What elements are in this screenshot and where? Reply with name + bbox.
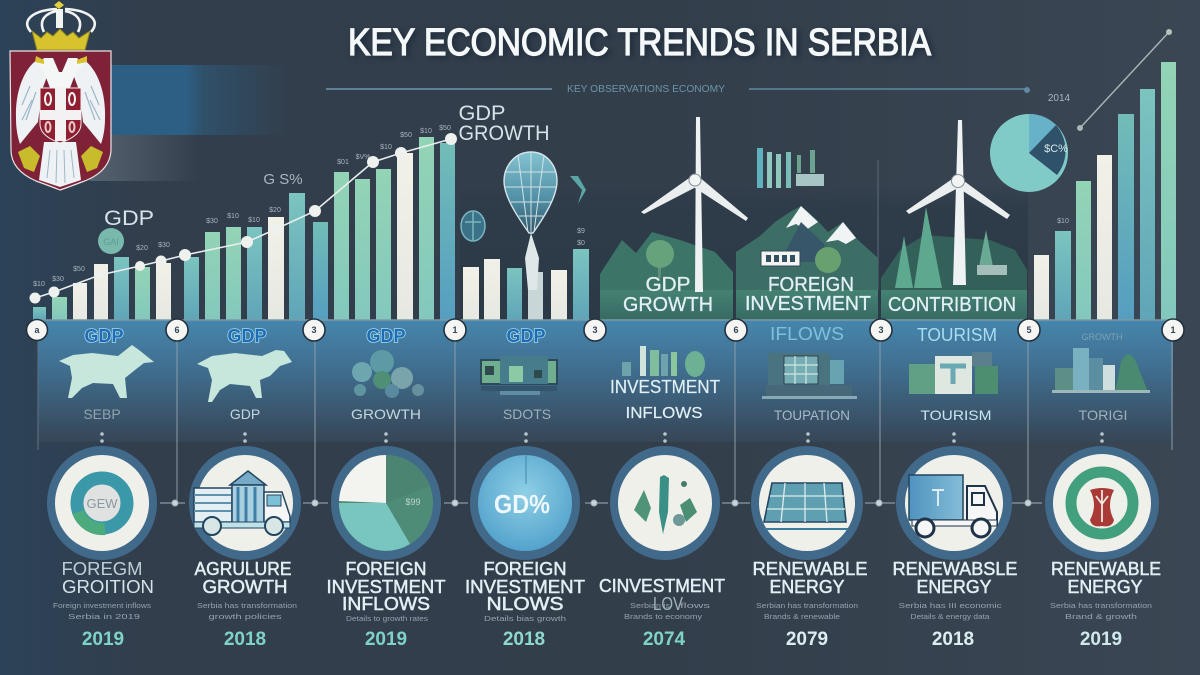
label: SDOTS [503, 406, 551, 422]
column 2 text: 2018 [224, 629, 266, 650]
subtitle rule with caption: KEY OBSERVATIONS ECONOMY [567, 84, 725, 95]
label: FOREIGN [768, 274, 854, 296]
label: INFLOWS [626, 405, 702, 422]
column 8 text [1050, 559, 1161, 650]
bar value labels: $10 [248, 217, 260, 224]
heading: GDP [227, 326, 267, 346]
numbered timeline badges: a [34, 325, 40, 335]
chart label: year: 2014 [1048, 93, 1071, 104]
heading: IFLOWS [770, 324, 844, 344]
numbered timeline badges: 3 [878, 325, 884, 335]
shield [10, 51, 111, 190]
dark textured landscape strip [460, 185, 1028, 320]
bar value labels: $0 [577, 240, 585, 247]
label: GDP [646, 274, 690, 296]
heading: GDP [84, 326, 124, 346]
panel 5: investment inflows [595, 320, 736, 442]
column 7 text: RENEWABSLE [892, 559, 1018, 579]
column 7 text: Serbia has III economic [898, 601, 1002, 610]
column 5 text: LOV [653, 594, 683, 614]
heading: TOURISM [917, 325, 997, 345]
icon: globe balloon [504, 152, 557, 290]
icon: green coin [98, 228, 124, 254]
bar value labels: $01 [337, 159, 349, 166]
icon: goat [197, 350, 292, 402]
column 2 text: growth policies [208, 612, 282, 621]
bar value labels: $30 [52, 276, 64, 283]
column 6 text: Serbian has transformation [756, 601, 858, 610]
circle icon 1: donut gauge [47, 446, 157, 560]
talons [18, 146, 103, 172]
column 4 text [465, 559, 585, 650]
column 8 text: RENEWABLE [1051, 559, 1161, 579]
column 4 text: NLOWS [486, 594, 564, 614]
circle icon 1: donut gauge: GEW [86, 496, 118, 511]
numbered timeline badges: 6 [733, 325, 739, 335]
circle icon 3: pie chart: $99 [405, 497, 421, 507]
column 7 text: Details & energy data [910, 612, 990, 621]
column 3 text: INVESTMENT [326, 577, 446, 597]
small house [977, 265, 1007, 275]
chart label: percentage: G S% [263, 171, 303, 188]
column 1 text [53, 559, 154, 650]
column 3 text: Details to growth rates [346, 614, 428, 623]
column 7 text: ENERGY [916, 577, 992, 597]
heading: GDP [506, 326, 546, 346]
column 6 text: 2079 [786, 629, 828, 650]
trees [895, 207, 994, 288]
bar value labels: $V% [356, 154, 370, 161]
landscape panel: GDP growth [600, 117, 748, 320]
connector dots between circles [160, 500, 1042, 506]
label: CONTRIBTION [888, 294, 1016, 316]
bar value labels: $10 [380, 144, 392, 151]
heading: GDP [366, 326, 406, 346]
pie chart: $C% [1044, 143, 1068, 155]
central red shield with cross [40, 88, 81, 143]
title: KEY ECONOMIC TRENDS IN SERBIA [348, 22, 932, 64]
numbered timeline badges: 3 [311, 325, 317, 335]
bar value labels: $9 [577, 228, 585, 235]
numbered timeline badges: 5 [1026, 325, 1032, 335]
icon: tree [646, 240, 674, 278]
column 2 text [194, 559, 297, 650]
eagle wings and body [16, 58, 48, 144]
bar chart: right side [1034, 62, 1176, 320]
chart label: GDP growth [458, 102, 550, 145]
label: GROWTH [623, 294, 713, 316]
growth arrow line [1077, 29, 1172, 131]
column 6 text: RENEWABLE [752, 559, 868, 579]
panel 4: SDOTS [455, 320, 595, 442]
circle icon 2: truck with bank [189, 446, 301, 560]
column 6 text: ENERGY [770, 577, 844, 597]
column 5 text [599, 576, 725, 650]
icon: skyline [1052, 348, 1150, 393]
bar value labels [33, 125, 1069, 288]
mini bars [757, 148, 824, 188]
panel 2: GDP [177, 320, 315, 442]
column 2 text: Serbia has transformation [197, 601, 297, 610]
icon: green coin: GAI [103, 237, 119, 247]
column 5 text: flows [680, 601, 710, 610]
bar chart: GDP growth [33, 137, 589, 320]
panel 6: inflows [736, 320, 881, 442]
column 3 text: FOREIGN [346, 559, 426, 579]
bar value labels: $50 [400, 132, 412, 139]
landscape panel: contribution [881, 120, 1027, 320]
label: TOURISM [920, 407, 992, 423]
blue band behind coat of arms [100, 65, 290, 135]
icon: city with leaf [622, 346, 705, 377]
label: GROWTH [351, 406, 421, 422]
circle icon 6: solar panel [751, 446, 863, 560]
circle icon 4: GD percent: GD% [494, 489, 550, 519]
chart label: GDP: GDP [104, 207, 154, 230]
landscape panel: foreign investment [736, 148, 878, 320]
bar value labels: $30 [158, 242, 170, 249]
panel 7: tourism [881, 320, 1029, 442]
trend line with markers [30, 133, 457, 304]
heading: INVESTMENT [610, 377, 720, 397]
column 7 text [892, 559, 1018, 650]
label [745, 274, 871, 315]
column 3 text [326, 559, 446, 650]
label: TORIGI [1078, 407, 1128, 423]
column 2 text: AGRULURE [194, 559, 292, 579]
wind turbine [906, 120, 1010, 285]
chart label: GDP growth: GDP [458, 102, 506, 125]
label: TOUPATION [774, 407, 850, 423]
bar value labels: $50 [73, 266, 85, 273]
label: GDP [230, 406, 260, 422]
label: INVESTMENT [745, 293, 871, 315]
circle icon 3: pie chart [331, 446, 441, 560]
bar value labels: $50 [439, 125, 451, 132]
bar value labels: $10 [227, 213, 239, 220]
column 4 text: INVESTMENT [465, 577, 585, 597]
column 2 text: GROWTH [202, 577, 288, 597]
column 1 text: Foreign investment inflows [53, 601, 151, 610]
bar value labels: $10 [33, 281, 45, 288]
numbered timeline badges: 1 [1170, 325, 1176, 335]
icon: machine [481, 356, 557, 395]
column 4 text: Details bias growth [484, 614, 566, 623]
column 4 text: FOREIGN [484, 559, 566, 579]
column 1 text: Serbia in 2019 [68, 612, 140, 621]
column 8 text: Brand & growth [1065, 612, 1137, 621]
icon: small plant [570, 176, 586, 204]
column 7 text: 2018 [932, 629, 974, 650]
label: SEBP [83, 406, 121, 422]
icon: goat [59, 345, 154, 398]
column 1 text: 2019 [82, 629, 124, 650]
numbered timeline badges: 1 [452, 325, 458, 335]
column 5 text: CINVESTMENT [599, 576, 725, 596]
column 8 text: 2019 [1080, 629, 1122, 650]
column 5 text: Brands to economy [624, 612, 702, 621]
column 4 text: 2018 [503, 629, 545, 650]
coat of arms of Serbia [10, 1, 111, 190]
column 5 text: Serbian is [630, 601, 670, 610]
small stem dots above circles [100, 432, 1104, 443]
column 5 text: 2074 [643, 629, 686, 650]
column 3 text: 2019 [365, 629, 407, 650]
label [623, 274, 713, 316]
wind turbine [641, 117, 748, 292]
column 1 text: GROITION [62, 577, 154, 597]
crown [27, 1, 95, 50]
numbered timeline badges [26, 319, 1184, 500]
icon: small balloon [461, 211, 485, 241]
bar value labels: $20 [136, 245, 148, 252]
panel 8: tourism [1029, 320, 1173, 442]
grey band behind coat of arms [90, 135, 200, 181]
subtitle rule with caption [326, 84, 1030, 95]
bar value labels: $30 [206, 218, 218, 225]
column 3 text: INFLOWS [342, 594, 430, 614]
bar value labels: $20 [269, 207, 281, 214]
column 1 text: FOREGM [62, 559, 142, 579]
column 6 text [752, 559, 868, 650]
numbered timeline badges: 3 [592, 325, 598, 335]
icon: hotel buildings [909, 352, 998, 394]
icon: office building [762, 353, 857, 399]
numbered timeline badges: 6 [174, 325, 180, 335]
column 8 text: Serbia has transformation [1050, 601, 1152, 610]
column 6 text: Brands & renewable [764, 612, 840, 621]
circle icon 4: GD percent [470, 446, 580, 560]
tree [815, 247, 841, 273]
bar value labels: $10 [420, 128, 432, 135]
chart label: GDP growth: GROWTH [458, 122, 550, 145]
circle icon 7: delivery truck [896, 446, 1012, 560]
icon: cluster [352, 350, 424, 398]
panel 1: GDP [38, 320, 177, 442]
panel 3: growth [315, 320, 455, 442]
column 8 text: ENERGY [1068, 577, 1142, 597]
heading: GROWTH [1082, 332, 1122, 342]
circle icon 5: plants [610, 446, 720, 560]
pie chart [990, 114, 1068, 192]
bar value labels: $10 [1057, 218, 1069, 225]
factory building [761, 251, 800, 266]
circle icon 8: Serbian emblem ring [1045, 446, 1159, 560]
